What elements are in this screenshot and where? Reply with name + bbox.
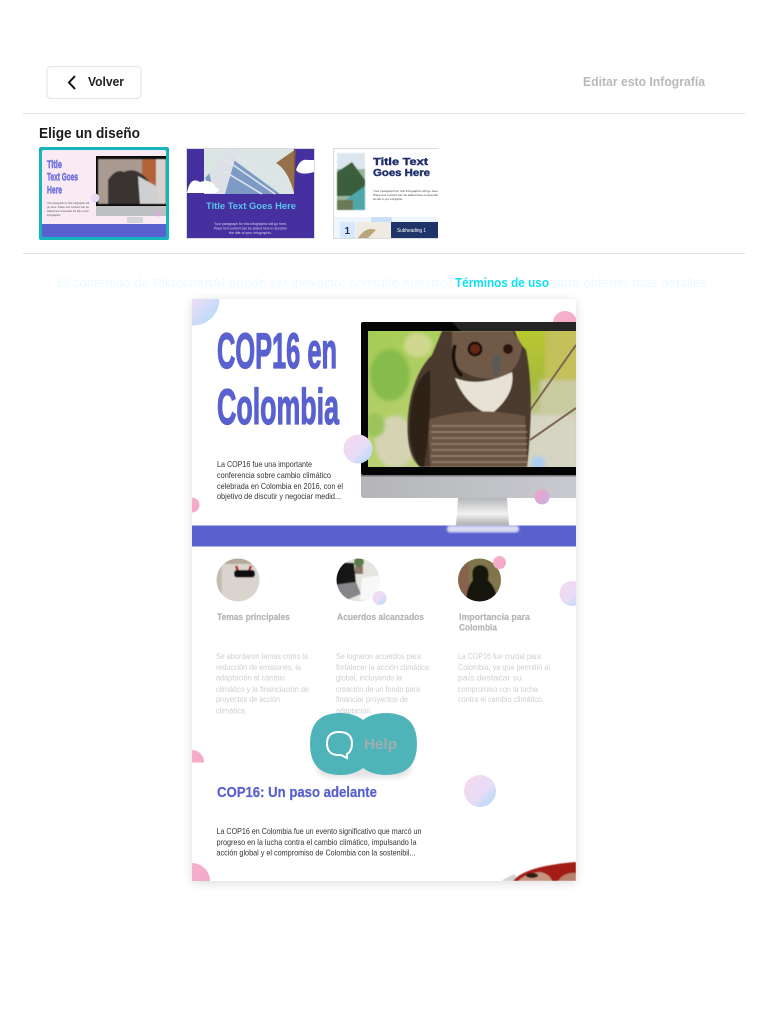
closing paragraph — [216, 826, 422, 858]
column 3: importance: Colombia — [459, 622, 498, 634]
body text: Se abordaron temas como la — [216, 652, 308, 661]
section heading: Elige un diseño — [39, 125, 140, 142]
body text: Colombia, ya que permitió al — [458, 663, 550, 672]
template thumbnail 3: Subheading 1 — [397, 228, 426, 234]
body text: país destacar su — [458, 674, 522, 682]
body text: financiar proyectos de — [336, 695, 409, 704]
template thumbnail 1 (selected): Here — [47, 184, 62, 196]
template thumbnail 1 (selected): Your paragraph for this infographic will — [47, 202, 89, 205]
intro paragraph — [217, 459, 343, 501]
title: COP16 en — [217, 323, 337, 379]
body text — [216, 652, 309, 716]
photo: laptop on desk — [336, 558, 380, 602]
body text: compromiso con la lucha — [458, 685, 538, 694]
template thumbnail 1 (selected): go here. Place text content can be — [47, 206, 90, 209]
column 2: agreements — [334, 556, 430, 716]
template thumbnail 2: Your paragraph for this infographic will go here. — [214, 222, 287, 226]
template thumbnail 1 (selected): Text Goes — [47, 172, 78, 184]
subheading: COP16: Un paso adelante — [217, 785, 377, 801]
disclaimer notice: para obtener más detalles — [553, 275, 708, 290]
help chat button: Help — [364, 737, 397, 753]
template thumbnail 3: 1 — [344, 226, 350, 237]
disclaimer notice: El contenido de PiktochartAI puede ser inexacto; consulte nuestros — [57, 275, 455, 290]
template thumbnail 3: Goes Here — [373, 168, 430, 179]
decorative bubble left edge lower — [192, 750, 204, 762]
body text: climática. — [216, 706, 247, 716]
body text — [458, 652, 550, 704]
body text: contra el cambio climático. — [458, 695, 544, 704]
column 3: importance — [456, 556, 550, 704]
disclaimer notice — [57, 275, 708, 290]
template thumbnail 1 (selected): added here to describe the title of your — [47, 210, 89, 213]
template thumbnail 3: Your paragraph for this infographic will go here. — [373, 189, 439, 193]
template thumbnail 3: Title Text — [373, 157, 429, 168]
heading: Temas principales — [217, 612, 290, 623]
decorative bubble top right — [553, 311, 576, 322]
intro paragraph: celebrada en Colombia en 2016, con el — [217, 481, 343, 491]
monitor with owl photo — [360, 322, 580, 533]
monitor stand — [455, 498, 510, 526]
intro paragraph: La COP16 fue una importante — [217, 459, 312, 469]
monitor base reflection — [447, 526, 519, 532]
infographic preview panel — [192, 299, 576, 881]
decorative bubble on monitor — [534, 490, 550, 504]
help chat button — [310, 713, 417, 775]
decorative bubble right edge — [560, 581, 576, 606]
template thumbnail 1 (selected): Title — [47, 159, 62, 171]
owl photo — [368, 331, 576, 467]
body text: La COP16 fue crucial para — [458, 652, 541, 661]
intro paragraph: objetivo de discutir y negociar medid... — [217, 491, 341, 501]
decorative bubble top left — [192, 299, 220, 326]
decorative bubble on column 3 photo — [493, 556, 506, 569]
body text: reducción de emisiones, la — [216, 663, 301, 672]
icon: speech bubble — [327, 732, 352, 758]
decorative bubble bottom left — [192, 863, 210, 881]
decorative bubble left edge — [192, 498, 200, 512]
closing paragraph: acción global y el compromiso de Colombia con la sostenibil... — [216, 848, 416, 858]
template thumbnail 2 — [186, 148, 315, 239]
decorative bubble right of subheading — [464, 775, 496, 807]
intro paragraph: conferencia sobre cambio climático — [217, 470, 331, 480]
body text: proyectos de acción — [216, 695, 280, 704]
closing paragraph: La COP16 en Colombia fue un evento significativo que marcó un — [216, 826, 422, 836]
decorative bubble left of monitor — [344, 434, 372, 464]
body text: adaptación. — [336, 706, 372, 716]
template thumbnail 1 (selected): infographic. — [47, 214, 61, 217]
title — [218, 332, 340, 426]
body text: climático y la financiación de — [216, 685, 309, 694]
back button: Volver — [88, 74, 124, 89]
body text: creación de un fondo para — [336, 685, 420, 694]
title: Colombia — [217, 379, 340, 435]
blue band — [192, 526, 576, 546]
body text: adaptación al cambio — [216, 674, 285, 682]
closing paragraph: progreso en la lucha contra el cambio climático, impulsando la — [216, 837, 417, 847]
decorative bubble on column 2 photo — [372, 591, 386, 605]
template thumbnail 3: the title of your infographic. — [373, 197, 403, 201]
help button shadow — [316, 752, 412, 778]
photo: bear — [458, 558, 501, 602]
body text: global, incluyendo la — [336, 674, 402, 682]
photo: face with red paint — [501, 862, 576, 881]
template thumbnail 2: Title Text Goes Here — [206, 201, 296, 211]
edit link: Editar esto Infografía — [583, 74, 706, 89]
template thumbnail 1 (selected) — [39, 147, 169, 240]
template thumbnail 3 — [333, 148, 439, 239]
body text — [336, 652, 430, 716]
template thumbnail 2: the title of your infographic. — [229, 231, 272, 235]
heading: Importancia para — [459, 612, 531, 623]
template thumbnail 3: Place text content can be added here to describe — [373, 193, 439, 197]
infographic preview shadow — [192, 301, 576, 883]
disclaimer notice: Términos de uso — [455, 275, 549, 290]
body text: fortalecer la acción climática — [336, 663, 430, 672]
heading: Acuerdos alcanzados — [337, 612, 424, 623]
photo: mask on wall — [216, 558, 260, 602]
back button — [47, 66, 141, 98]
template thumbnail 2: Place text content can be added here to describe — [214, 226, 287, 230]
column 1: main topics — [214, 556, 309, 716]
body text: Se lograron acuerdos para — [336, 652, 421, 661]
